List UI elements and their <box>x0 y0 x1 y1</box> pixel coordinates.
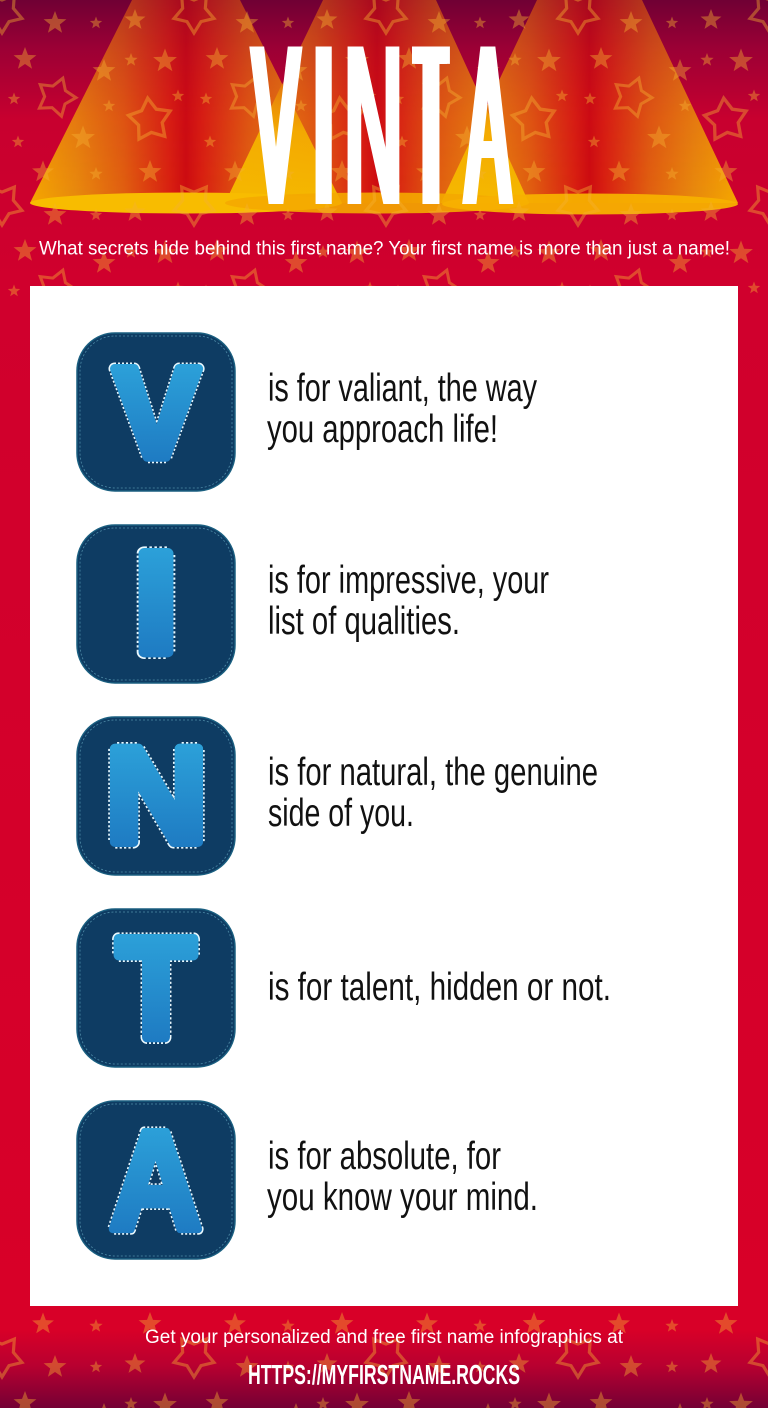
text: T line: is for talent, hidden or not. <box>268 966 611 1009</box>
title: A <box>462 0 505 253</box>
title: I <box>305 0 337 253</box>
row: I <box>77 523 549 683</box>
title <box>249 0 514 253</box>
title: N <box>341 0 399 253</box>
text: A line 1: is for absolute, for <box>268 1135 501 1178</box>
spotlight beams <box>30 0 738 203</box>
row: A <box>77 1101 538 1259</box>
panel: white content <box>30 286 738 1306</box>
subtitle: What secrets hide behind this first name? Your first name is more than just a name! <box>39 238 730 260</box>
icon: letter V: V <box>114 342 199 485</box>
icon: letter A: A <box>109 1101 202 1259</box>
icon: letter T: T <box>117 909 195 1067</box>
text: V line 2: you approach life! <box>267 408 498 451</box>
spotlights <box>30 0 738 214</box>
text: I line 1: is for impressive, your <box>268 559 549 602</box>
row: T <box>77 909 611 1067</box>
icon: letter V <box>77 333 235 491</box>
text: N line 1: is for natural, the genuine <box>268 751 598 794</box>
icon: letter I <box>77 523 235 683</box>
stars: top <box>0 0 768 300</box>
icon: letter T: T <box>117 909 195 1067</box>
icon: letter I: I <box>134 523 178 683</box>
text: A line 2: you know your mind. <box>267 1176 538 1219</box>
icon: letter I: I <box>134 523 178 683</box>
icon: letter A: A <box>109 1101 202 1259</box>
row: V <box>77 333 537 491</box>
spotlight: left <box>30 0 282 203</box>
beam overlap: left and middle <box>225 84 342 203</box>
beam overlap: middle and right <box>441 108 529 203</box>
text: V line 1: is for valiant, the way <box>268 367 537 410</box>
spotlight: right <box>441 0 738 203</box>
spotlight: middle <box>230 0 476 203</box>
icon: letter T <box>77 909 235 1067</box>
spotlight pool: middle <box>225 192 529 214</box>
title: T <box>411 0 438 253</box>
icon: letter N: N <box>106 720 207 871</box>
title: V <box>249 0 295 253</box>
icon: letter A <box>77 1101 235 1259</box>
footer text: Get your personalized and free first name infographics at <box>145 1327 624 1348</box>
text: N line 2: side of you. <box>268 792 414 835</box>
icon: letter N <box>77 717 235 875</box>
stars: bottom <box>0 1306 768 1408</box>
text: I line 2: list of qualities. <box>268 600 460 643</box>
footer url: HTTPS://MYFIRSTNAME.ROCKS <box>248 1359 520 1390</box>
spotlight pool: right <box>442 194 738 214</box>
icon: letter V: V <box>114 342 199 485</box>
icon: letter N: N <box>106 720 207 871</box>
row: N <box>77 717 598 875</box>
spotlight pool: left <box>30 192 342 214</box>
